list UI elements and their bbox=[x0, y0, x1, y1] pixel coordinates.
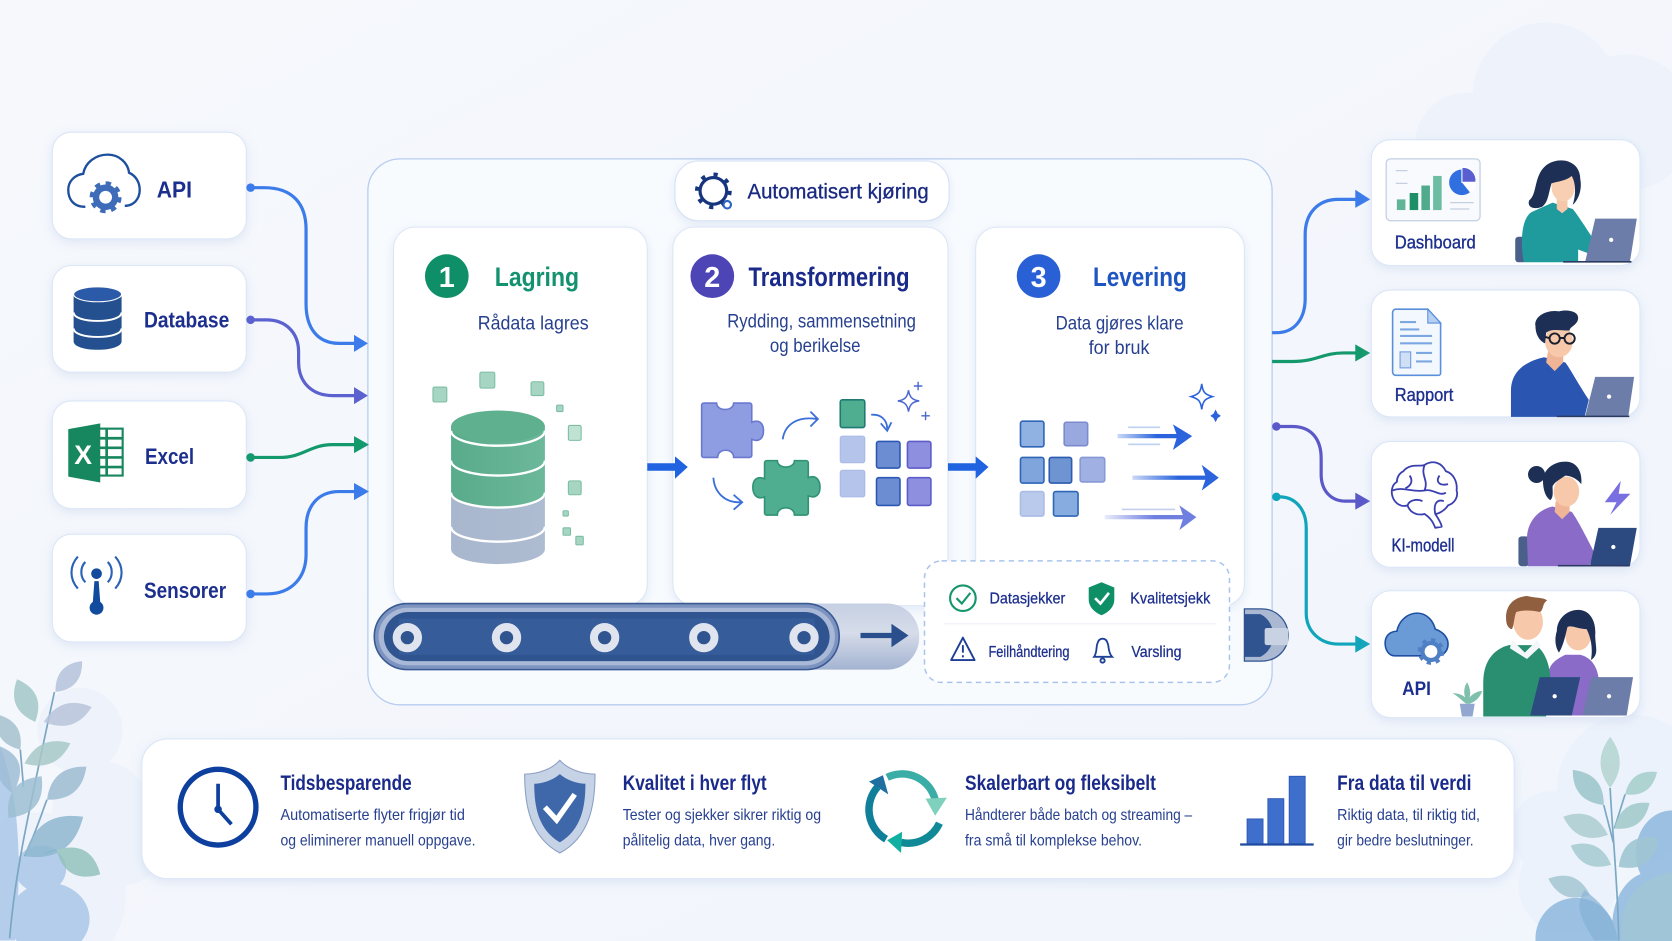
arrow: step 1 to step 2 bbox=[647, 456, 688, 479]
conveyor end cap bbox=[1244, 609, 1288, 661]
arrow: Sensorer to pipeline bbox=[246, 483, 369, 598]
plant bbox=[1452, 682, 1482, 717]
header pill: Automatisert kjøring: Automatisert kjøring bbox=[747, 179, 929, 203]
benefits strip: pålitelig data, hver gang. bbox=[623, 833, 775, 850]
icon: shield bbox=[525, 760, 595, 853]
illustration: organised blocks bbox=[840, 382, 931, 505]
icon: lightning bbox=[1605, 481, 1630, 515]
step 2: Transformering: og berikelse bbox=[770, 336, 861, 357]
benefits strip: gir bedre beslutninger. bbox=[1337, 833, 1474, 850]
benefits strip: Kvalitet i hver flyt bbox=[623, 771, 767, 795]
conveyor belt bbox=[374, 604, 919, 670]
icon: bar chart bbox=[1240, 776, 1314, 845]
step 2: Transformering: Transformering bbox=[749, 262, 910, 292]
icon: cloud gear bbox=[1385, 613, 1448, 663]
header pill: Automatisert kjøring bbox=[675, 161, 949, 221]
benefits strip: fra små til komplekse behov. bbox=[965, 833, 1142, 850]
benefits strip: Tester og sjekker sikrer riktig og bbox=[623, 807, 821, 824]
input card: Sensorer bbox=[52, 534, 246, 642]
input card: API bbox=[52, 132, 246, 239]
arrow: Database to pipeline bbox=[246, 316, 368, 404]
input card: Excel: Excel bbox=[145, 444, 194, 469]
step 2: Transformering bbox=[673, 227, 948, 606]
quality checks panel: Varsling bbox=[1131, 644, 1181, 661]
illustration: database with data blocks bbox=[433, 372, 583, 564]
main pipeline panel bbox=[368, 159, 1272, 705]
output card: Dashboard: Dashboard bbox=[1395, 231, 1476, 252]
output card: Dashboard bbox=[1371, 140, 1640, 266]
icon: shield bbox=[1089, 582, 1114, 615]
icon: database bbox=[74, 287, 122, 350]
conveyor arrow bbox=[861, 624, 909, 647]
step 3: Levering: Levering bbox=[1093, 262, 1187, 292]
badge 3 bbox=[1017, 254, 1060, 298]
right foliage bbox=[1511, 714, 1672, 941]
benefits strip: Skalerbart og fleksibelt bbox=[965, 771, 1156, 795]
input card: Excel bbox=[52, 401, 246, 509]
output card: KI-modell: KI-modell bbox=[1392, 535, 1454, 555]
icon: clock bbox=[180, 769, 256, 845]
benefits strip: Fra data til verdi bbox=[1337, 771, 1472, 795]
illustration: data blocks bbox=[1020, 421, 1105, 516]
arrow: to API bbox=[1272, 493, 1370, 653]
icon: warning bbox=[951, 638, 975, 660]
output card: Rapport: Rapport bbox=[1395, 384, 1454, 405]
badge 1 bbox=[425, 254, 469, 298]
output card: API bbox=[1371, 591, 1640, 718]
benefits strip: Tidsbesparende bbox=[280, 771, 412, 795]
input card: Database bbox=[52, 266, 246, 372]
arrow: Excel to pipeline bbox=[246, 436, 369, 462]
top right cloud bbox=[1415, 22, 1672, 195]
step 1: Lagring bbox=[393, 227, 647, 606]
conveyor rollers bbox=[397, 627, 815, 648]
badge 2 bbox=[690, 254, 734, 298]
icon: document bbox=[1393, 309, 1441, 375]
icon: cycle arrows bbox=[869, 774, 947, 853]
benefits strip: Riktig data, til riktig tid, bbox=[1337, 807, 1480, 824]
input card: Sensorer: Sensorer bbox=[144, 578, 226, 603]
benefits strip: Håndterer både batch og streaming – bbox=[965, 807, 1192, 824]
badge 2: 2 bbox=[704, 262, 720, 294]
quality checks panel: Feilhåndtering bbox=[988, 644, 1070, 661]
arrow: to Rapport bbox=[1272, 344, 1370, 361]
icon: Excel: X bbox=[74, 440, 92, 470]
step 1: Lagring: Rådata lagres bbox=[478, 313, 589, 334]
icon: bell bbox=[1094, 639, 1112, 663]
illustration: puzzle pieces bbox=[702, 403, 891, 515]
left foliage bbox=[0, 661, 158, 941]
quality checks panel: Kvalitetsjekk bbox=[1130, 591, 1211, 608]
benefits strip bbox=[142, 739, 1514, 879]
step 1: Lagring: Lagring bbox=[495, 262, 579, 292]
badge 1: 1 bbox=[439, 262, 455, 294]
quality checks panel bbox=[925, 561, 1229, 682]
icon: check bbox=[950, 585, 976, 611]
benefits strip: Automatiserte flyter frigjør tid bbox=[280, 807, 465, 824]
arrow: to KI-modell bbox=[1272, 422, 1370, 510]
icon: sensor bbox=[71, 557, 122, 615]
badge 3: 3 bbox=[1031, 262, 1047, 294]
output card: KI-modell bbox=[1371, 441, 1640, 567]
input card: Database: Database bbox=[144, 307, 229, 332]
icon: cloud with gear bbox=[68, 155, 140, 213]
illustration: delivery arrows bbox=[1105, 384, 1221, 530]
icon: brain bbox=[1392, 462, 1457, 528]
step 3: Levering: Data gjøres klare bbox=[1056, 313, 1184, 334]
icon: Excel bbox=[68, 423, 123, 482]
step 2: Transformering: Rydding, sammensetning bbox=[727, 311, 916, 332]
step 3: Levering: for bruk bbox=[1089, 338, 1150, 359]
arrow: to Dashboard bbox=[1272, 190, 1370, 333]
person at laptop bbox=[1515, 160, 1637, 262]
input card: API: API bbox=[157, 176, 192, 202]
output card: Rapport bbox=[1371, 290, 1640, 417]
step 3: Levering bbox=[976, 227, 1244, 606]
benefits strip: og eliminerer manuell oppgave. bbox=[280, 833, 476, 850]
icon: gear bbox=[697, 174, 731, 208]
icon: dashboard chart bbox=[1386, 159, 1480, 221]
two people at laptops bbox=[1483, 596, 1633, 717]
quality checks panel: Datasjekker bbox=[990, 591, 1065, 608]
person with bun bbox=[1518, 462, 1637, 566]
person with glasses bbox=[1511, 311, 1634, 417]
arrow: API to pipeline bbox=[246, 183, 368, 352]
output card: API: API bbox=[1402, 679, 1431, 700]
arrow: step 2 to step 3 bbox=[948, 456, 988, 479]
